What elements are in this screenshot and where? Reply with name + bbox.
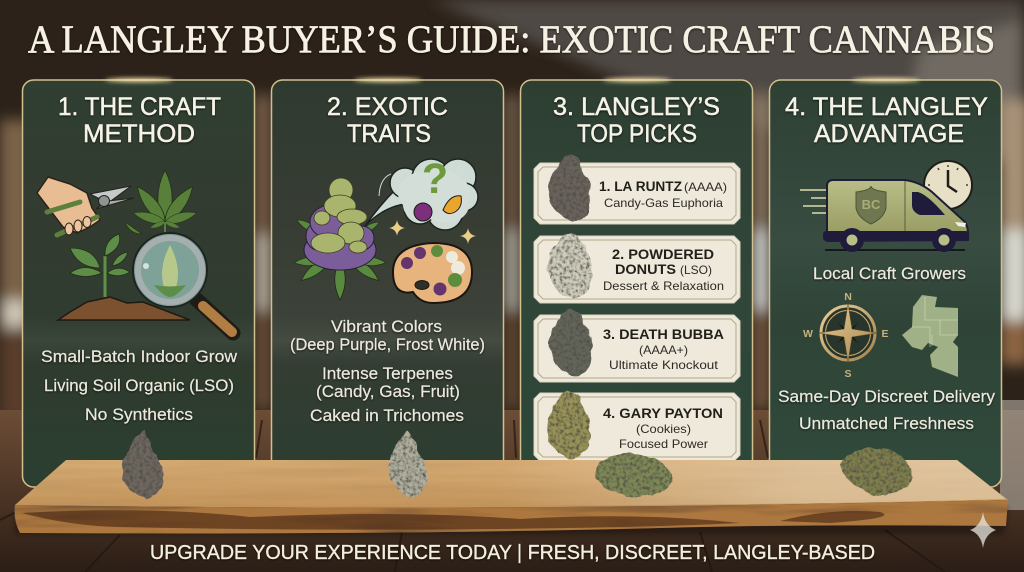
icon: hand with pruning shears [37,177,134,235]
card: death bubba [534,309,740,382]
heading: the craft method: 1. THE CRAFT [58,93,221,121]
text: craft method list [41,347,238,424]
card: death bubba: (AAAA+) [639,343,688,357]
heading: the langley advantage [785,93,988,148]
card: powdered donuts: (LSO) [680,263,712,277]
text: exotic traits list: Intense Terpenes [322,364,453,383]
card: la runtz: (AAAA) [684,180,727,194]
icon: compass [803,291,889,380]
icon: seedling in soil [58,234,190,320]
footer tagline: UPGRADE YOUR EXPERIENCE TODAY | FRESH, DISCREET, LANGLEY-BASED [150,542,875,564]
text: craft method list: Small-Batch Indoor Grow [41,347,238,366]
heading: langley's top picks: 3. LANGLEY’S [553,93,720,121]
heading: exotic traits: TRAITS [347,120,431,148]
bud: plank display 3 [596,453,672,497]
wooden plank [15,460,1008,534]
card: la runtz: 1. LA RUNTZ [599,179,682,194]
text: exotic traits list: (Candy, Gas, Fruit) [316,382,460,401]
card: death bubba: 3. DEATH BUBBA [603,327,724,342]
heading: exotic traits [327,93,448,148]
card: powdered donuts: DONUTS [615,262,676,277]
icon: compass: E [881,328,889,340]
heading: the langley advantage: ADVANTAGE [814,120,964,148]
sparkle watermark [970,512,996,548]
card: gary payton: 4. GARY PAYTON [603,406,723,421]
icon: compass: W [803,328,813,340]
text: exotic traits list: Caked in Trichomes [310,406,464,425]
icon: delivery van [800,180,969,252]
heading: the craft method: METHOD [83,120,195,148]
heading: langley's top picks: TOP PICKS [577,120,697,148]
icon: purple cannabis bud [294,178,386,300]
icon: compass: N [844,291,852,303]
text: local craft growers: Local Craft Growers [813,264,966,283]
icon: langley map [902,295,958,377]
icon: BC shield: BC [862,197,881,212]
icon: clock [924,161,972,209]
photo: powdered donuts bud [547,233,592,298]
text: exotic traits list: Vibrant Colors [331,317,442,336]
heading: langley's top picks [553,93,720,148]
panel: the langley advantage [770,78,1002,487]
panel: the craft method [22,78,254,487]
card: death bubba: Ultimate Knockout [609,358,719,372]
text: exotic traits list: (Deep Purple, Frost White) [290,335,485,354]
card: gary payton: (Cookies) [636,422,691,436]
bud: plank display 2 [388,431,427,498]
card: powdered donuts: 2. POWDERED [612,247,714,262]
text: craft method list: Living Soil Organic (LSO) [44,376,234,395]
icon: compass: S [844,368,852,380]
card: powdered donuts [534,233,740,303]
icon: cannabis leaf [125,170,198,234]
icon: artist palette [393,243,472,303]
icon: question mark: ? [422,155,448,203]
bud: plank display 4 [840,447,912,495]
panel: langley's top picks [520,78,752,487]
panel: exotic traits [272,78,504,487]
card: gary payton: Focused Power [619,437,708,451]
text: unmatched freshness: Unmatched Freshness [799,414,974,433]
icon: magnifying glass [133,233,233,333]
photo: la runtz bud [548,154,590,221]
heading: the langley advantage: 4. THE LANGLEY [785,93,988,121]
photo: gary payton bud [548,390,590,458]
text: same-day discreet delivery: Same-Day Discreet Delivery [778,387,996,406]
icon: sparkles [389,220,476,244]
text: craft method list: No Synthetics [85,405,193,424]
photo: death bubba bud [550,309,591,377]
text: exotic traits list [290,317,485,425]
icon: aroma cloud with fruit [365,155,478,230]
card: la runtz [534,154,740,224]
heading: exotic traits: 2. EXOTIC [327,93,448,121]
bud: plank display 1 [122,431,164,498]
heading: the craft method [58,93,221,148]
card: powdered donuts: Dessert & Relaxation [603,279,724,293]
card: gary payton [534,390,740,461]
card: la runtz: Candy-Gas Euphoria [604,196,723,210]
icon: BC shield [856,186,886,224]
